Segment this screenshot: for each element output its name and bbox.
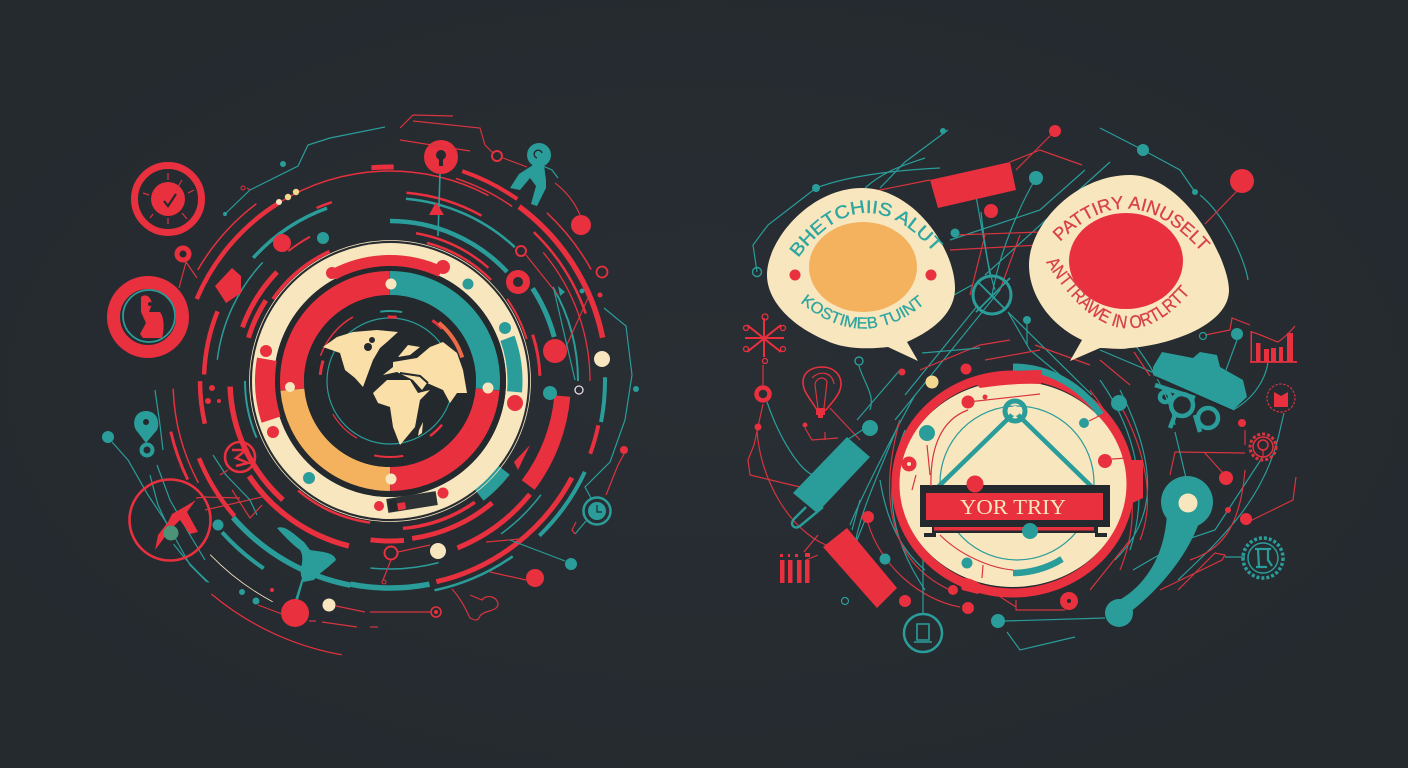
icon: checkmark badge bbox=[134, 166, 202, 232]
concentric arc segments bbox=[7, 0, 773, 764]
teal machine silhouette bbox=[1153, 352, 1247, 432]
icon: bar chart bbox=[1250, 326, 1297, 363]
icon: crossed circle hub bbox=[973, 276, 1011, 314]
icon: teal gear badge bbox=[1243, 538, 1283, 578]
panel: right connected network diagram bbox=[742, 125, 1297, 654]
bubble heading text: PATTIRY AINUSELT bbox=[1052, 196, 1211, 249]
icon: shield badge bbox=[1267, 384, 1295, 412]
icon: person badge bbox=[114, 282, 182, 352]
sign nodes bbox=[902, 394, 1128, 578]
icon: teal figure bbox=[510, 143, 558, 206]
bubble heading text: BHETCHIIS ALUT bbox=[789, 200, 944, 257]
icon: small bar pattern bbox=[780, 553, 810, 583]
sign title: YOR TRIY bbox=[960, 495, 1066, 519]
phone node on lower ring bbox=[1060, 592, 1078, 610]
inner globe arcs bbox=[283, 274, 497, 488]
donut chart ring bbox=[284, 275, 496, 487]
scribble circle icon bbox=[212, 442, 262, 530]
bubble caption text: ANTTRAWE IN ORTLRTT bbox=[1046, 259, 1188, 328]
panel: left globe radial diagram bbox=[7, 0, 773, 764]
lower left marker pin bbox=[102, 390, 207, 582]
top keyhole node bbox=[424, 140, 458, 236]
world map bbox=[323, 330, 467, 445]
teal handle rectangle bbox=[792, 437, 870, 527]
cream outer ring with segments bbox=[227, 218, 553, 544]
icon: ring node bbox=[756, 388, 770, 400]
icon: snowflake bbox=[744, 314, 786, 364]
teal gear and stem bbox=[1105, 476, 1213, 627]
red top rectangle bbox=[930, 162, 1016, 208]
icon: teal seat badge bbox=[904, 614, 942, 652]
network thin lines bbox=[748, 128, 1296, 650]
lower right nodes bbox=[370, 375, 639, 627]
lower teal splash bbox=[205, 385, 365, 627]
network nodes bbox=[752, 125, 1254, 628]
icon: light bulb bbox=[803, 367, 841, 418]
upper right nodes bbox=[400, 115, 632, 380]
speech bubble left bbox=[767, 188, 955, 361]
status bar on ring bbox=[386, 491, 438, 513]
speech bubble right bbox=[1029, 175, 1229, 361]
thin inner ring bbox=[940, 406, 1094, 560]
icon: small target node bbox=[177, 248, 197, 288]
upper left dots and circuit line bbox=[223, 127, 385, 252]
red tilted rectangle bbox=[823, 528, 897, 608]
ring marker dots bbox=[260, 260, 523, 511]
sign board bbox=[920, 485, 1110, 537]
red tilted block bbox=[215, 268, 241, 303]
central sign circle bbox=[896, 367, 1143, 601]
icon: red gear bbox=[1250, 434, 1276, 460]
bubble caption text: KOSTIMEB TUINT bbox=[801, 294, 922, 329]
crossed circle bird icon bbox=[130, 480, 262, 560]
triangle hanger bbox=[938, 401, 1092, 487]
